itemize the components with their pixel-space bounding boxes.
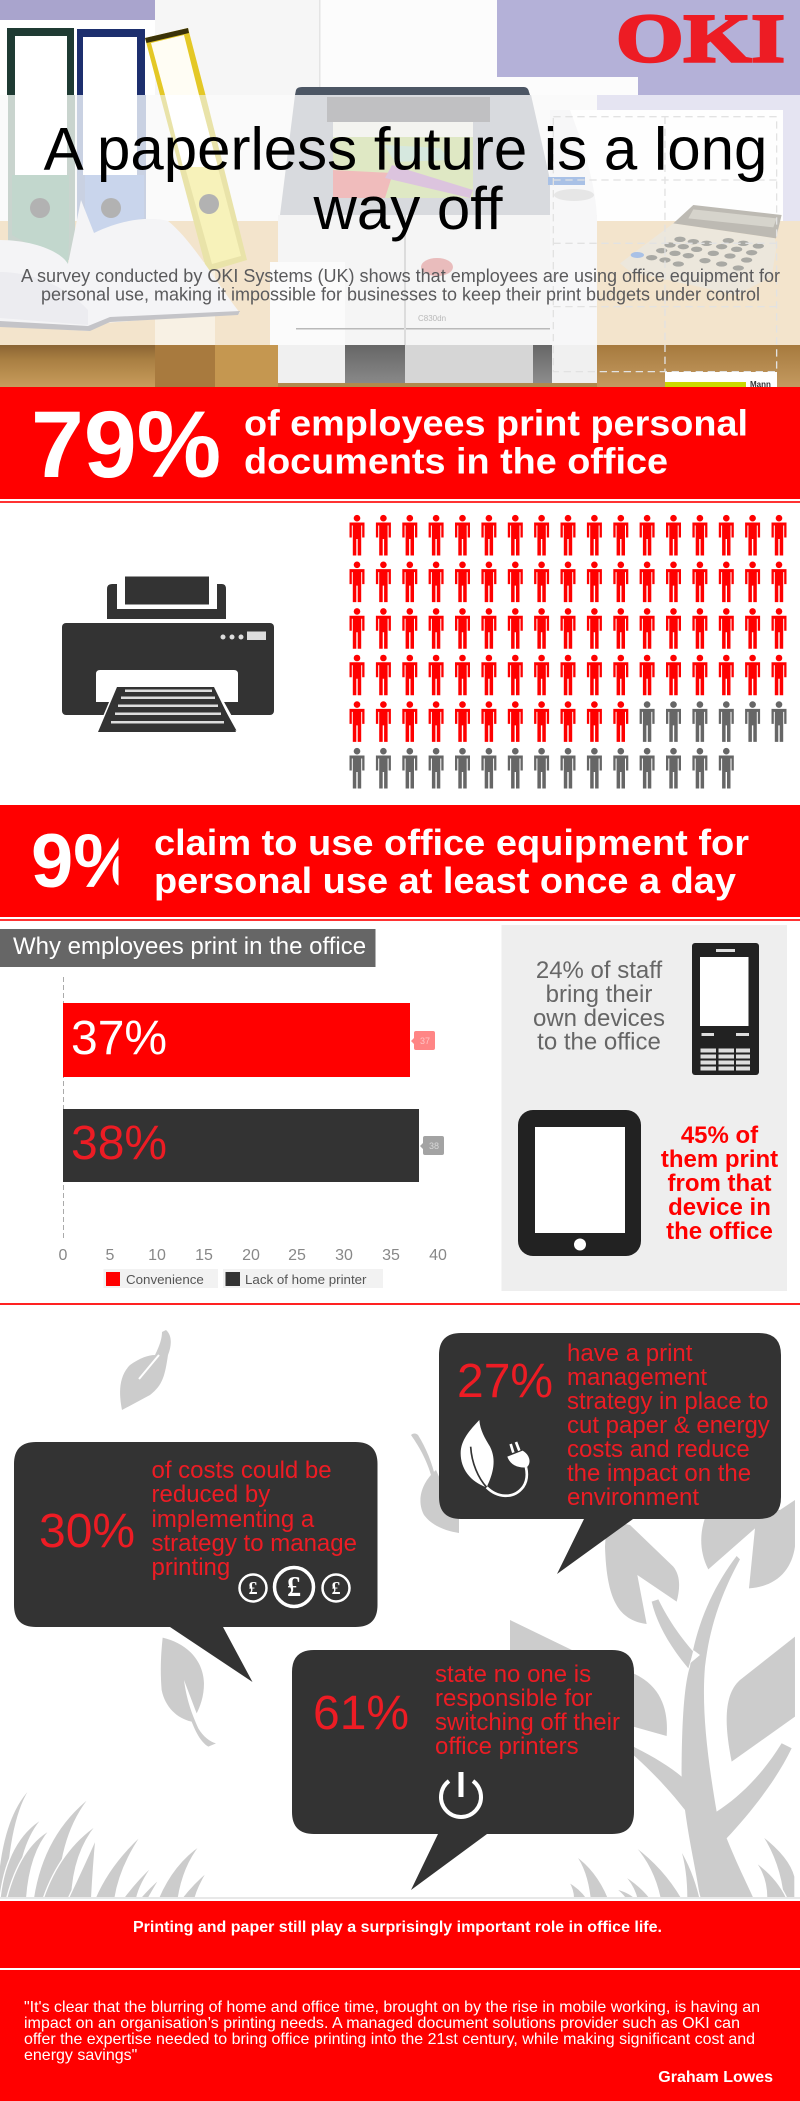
- icon: mobile phone: [692, 943, 759, 1075]
- axis labels: 0: [59, 1247, 68, 1264]
- axis labels: 35: [382, 1247, 400, 1264]
- bar: convenience: 37%: [71, 1012, 167, 1065]
- binders: [7, 28, 247, 272]
- bar chart: [59, 977, 447, 1288]
- text: cut paper & energy: [567, 1412, 770, 1439]
- axis labels: 5: [106, 1247, 115, 1264]
- icon: power button: [441, 1772, 481, 1817]
- speech bubble: 61%: [292, 1650, 634, 1890]
- bar: convenience: [63, 1003, 410, 1077]
- bar: lack of home printer: [63, 1109, 419, 1182]
- attribution: Graham Lowes: [658, 2069, 773, 2086]
- leaf: top: [120, 1330, 171, 1410]
- banner text: of employees print personal: [244, 402, 748, 444]
- leaf: behind right bubble: [411, 1434, 459, 1533]
- banner text: [154, 822, 749, 901]
- text: 24% of staff: to the office: [537, 1028, 661, 1056]
- text: responsible for: [435, 1685, 592, 1712]
- icon: printer: [62, 576, 274, 732]
- text: 45% of them print: them print: [661, 1146, 778, 1173]
- banner: 79%: [0, 387, 800, 503]
- icon: pound coins: £: [287, 1572, 301, 1603]
- panel: quote: [0, 1970, 800, 2101]
- axis labels: 15: [195, 1247, 213, 1264]
- logo: OKI: OKI: [616, 0, 785, 76]
- text: 45% of them print: the office: [666, 1218, 773, 1245]
- leaf: behind lower bubble: [510, 1620, 576, 1652]
- document on desk: Mann: [750, 380, 771, 389]
- quote text: impact on an organisation’s printing needs. A managed document solutions provider such as OKI can: [24, 2015, 740, 2032]
- subtitle: [21, 266, 780, 304]
- printer: [270, 87, 597, 387]
- open book: [0, 200, 240, 331]
- text: printing: [152, 1554, 230, 1581]
- text: state no one is: [435, 1661, 591, 1688]
- bar: lack of home printer: 38%: [71, 1117, 167, 1170]
- text: have a print: [567, 1340, 693, 1367]
- text: management: [567, 1364, 707, 1391]
- title: way off: [312, 175, 503, 242]
- text: 24% of staff: bring their: [546, 981, 652, 1008]
- banner text: documents in the office: [244, 441, 668, 482]
- icon: pound coins: £: [332, 1578, 340, 1598]
- text: 24% of staff: [533, 957, 665, 1056]
- text: implementing a: [152, 1506, 315, 1533]
- text: reduced by: [152, 1481, 270, 1508]
- binder ring holes: [30, 194, 219, 218]
- text: environment: [567, 1484, 699, 1511]
- panel: own devices: [502, 925, 787, 1291]
- quote text: [24, 1999, 760, 2064]
- stat: 27%: 27%: [457, 1355, 553, 1408]
- text: 45% of them print: from that: [668, 1170, 772, 1197]
- banner text: [244, 402, 748, 482]
- stat: 61%: 61%: [313, 1687, 409, 1740]
- tooltip: 37: 37: [420, 1036, 430, 1046]
- axis labels: [59, 1247, 447, 1264]
- chart heading: [0, 929, 376, 967]
- text: 45% of them print: device in: [668, 1194, 771, 1221]
- model label: C830dn: [418, 314, 446, 323]
- divider: [0, 1303, 800, 1305]
- banner text: claim to use office equipment for: [154, 822, 749, 863]
- banner text: personal use at least once a day: [154, 860, 736, 901]
- speech bubble: 27%: [439, 1333, 781, 1574]
- row 6: [350, 748, 734, 788]
- tooltip: 38: [420, 1136, 444, 1155]
- axis labels: 25: [288, 1247, 306, 1264]
- text: of costs could be: [152, 1457, 332, 1484]
- axis labels: 30: [335, 1247, 353, 1264]
- legend: [104, 1269, 383, 1288]
- text: [152, 1457, 357, 1581]
- calculator: [553, 117, 782, 372]
- text: [435, 1661, 620, 1760]
- text: 45% of them print: 45% of: [681, 1122, 759, 1149]
- icon: pound coins: £: [248, 1578, 258, 1598]
- icon: leaf and plug: [461, 1420, 530, 1496]
- icon: pound coins: [240, 1568, 350, 1606]
- text: costs and reduce: [567, 1436, 750, 1463]
- text: strategy in place to: [567, 1388, 768, 1415]
- text: switching off their: [435, 1709, 620, 1736]
- legend: Convenience: [126, 1272, 204, 1287]
- plant: [605, 1500, 795, 1898]
- title: [44, 116, 767, 242]
- banner: closing statement: [0, 1901, 800, 1968]
- legend: Lack of home printer: [245, 1272, 367, 1287]
- row 2: [350, 562, 786, 602]
- leaf: falling: [161, 1638, 216, 1747]
- text: strategy to manage: [152, 1530, 357, 1557]
- dashed template lines: [553, 117, 777, 372]
- chart heading: Why employees print in the office: [13, 933, 366, 960]
- icon: tablet: [518, 1110, 641, 1256]
- hero photo: office desk with printer: [0, 0, 800, 389]
- stat: 79%: 79%: [31, 392, 221, 498]
- text: office printers: [435, 1733, 579, 1760]
- subtitle: personal use, making it impossible for businesses to keep their print budgets under control: [41, 284, 760, 304]
- axis labels: 40: [429, 1247, 447, 1264]
- text: 24% of staff: own devices: [533, 1005, 665, 1032]
- tooltip: 38: 38: [429, 1141, 439, 1151]
- axis labels: 20: [242, 1247, 260, 1264]
- tooltip: 37: [411, 1031, 435, 1050]
- banner: closing statement: Printing and paper still play a surprisingly important role in office life.: [133, 1919, 662, 1936]
- quote text: energy savings": [24, 2047, 137, 2064]
- row 4: [350, 655, 786, 695]
- quote text: offer the expertise needed to bring office printing into the 21st century, while making significant cost and: [24, 2031, 755, 2048]
- stat: 9% (clipped): 9%: [31, 819, 141, 904]
- banner: 9%: [0, 805, 800, 921]
- document on desk: [665, 372, 777, 389]
- row 5: [350, 701, 786, 742]
- background illustration: plant, leaves and grass: [0, 1330, 795, 1898]
- handset on desk: [548, 110, 597, 345]
- grass: right: [568, 1835, 795, 1898]
- title: A paperless future is a long: [44, 116, 767, 182]
- stat: 30%: 30%: [39, 1505, 135, 1558]
- row 3: [350, 608, 786, 649]
- row 1: [350, 515, 786, 556]
- text: the impact on the: [567, 1460, 751, 1487]
- text: 24% of staff: 24% of staff: [536, 957, 662, 984]
- quote text: "It's clear that the blurring of home and office time, brought on by the rise in mobile working, is having an: [24, 1999, 760, 2016]
- pictogram: 79 of 100 people: [350, 515, 786, 788]
- speech bubble: 30%: [14, 1442, 378, 1682]
- grass: left: [0, 1787, 207, 1898]
- text: 45% of them print: [661, 1122, 778, 1245]
- subtitle: A survey conducted by OKI Systems (UK) shows that employees are using office equipment for: [21, 266, 780, 286]
- axis labels: 10: [148, 1247, 166, 1264]
- text: [567, 1340, 770, 1511]
